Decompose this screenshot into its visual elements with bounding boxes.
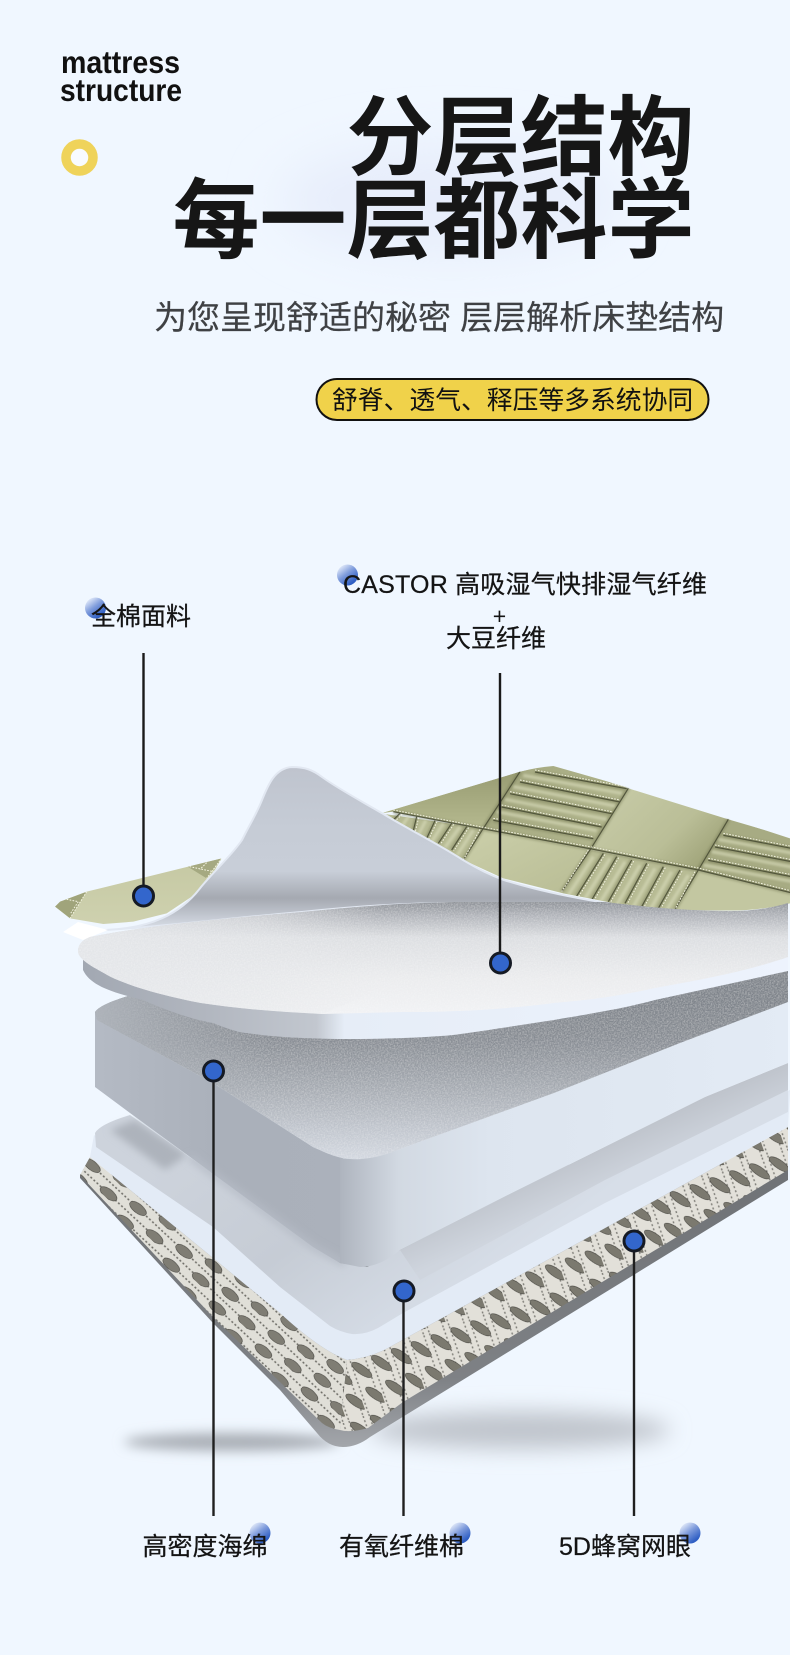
icon: yellow ring	[66, 144, 93, 171]
title	[172, 68, 694, 277]
label: aerobic fibre wadding: 有氧纤维棉	[339, 1533, 464, 1561]
layer: foam right face	[340, 1002, 788, 1267]
label: CASTOR and soy fibre	[337, 564, 707, 653]
label: 5D honeycomb mesh	[559, 1522, 700, 1561]
leader: cotton fabric	[134, 653, 154, 906]
seam shadows	[392, 772, 790, 909]
layer: towel edge	[83, 950, 788, 1039]
layer: foam left face	[95, 1012, 345, 1264]
subtitle: 为您呈现舒适的秘密 层层解析床垫结构	[154, 299, 724, 336]
label: CASTOR and soy fibre: 大豆纤维	[446, 625, 546, 653]
strip highlights	[402, 775, 790, 910]
layer: cotton cover fabric left	[55, 858, 222, 924]
mattress illustration	[50, 763, 790, 1451]
layer: 5D honeycomb mesh	[80, 1127, 788, 1431]
layer: base edge	[80, 1160, 788, 1447]
heading: mattress structure: mattress	[61, 44, 180, 80]
layer: cotton cover fabric right	[380, 763, 790, 912]
heading: mattress structure: structure	[60, 72, 182, 108]
leader: aerobic fibre	[394, 1281, 414, 1516]
label: cotton fabric: 全棉面料	[91, 603, 191, 631]
stitch lines	[392, 772, 790, 909]
callout pill	[316, 379, 708, 420]
layer: fibre side band	[90, 1090, 790, 1360]
soft glow behind title	[280, 145, 620, 255]
label: CASTOR and soy fibre: +	[493, 603, 506, 629]
title: 分层结构	[346, 68, 694, 194]
title: 每一层都科学	[172, 151, 694, 277]
label: 5D honeycomb mesh: 5D蜂窝网眼	[559, 1533, 691, 1561]
leader: 5D mesh	[624, 1231, 644, 1516]
callout pill: 舒脊、透气、释压等多系统协同	[332, 386, 693, 415]
layer: aerobic fibre wadding	[95, 1063, 788, 1334]
leader: CASTOR fibre	[490, 673, 510, 973]
layer: white notch	[63, 922, 108, 940]
heading: mattress structure	[60, 44, 182, 108]
label: high density foam: 高密度海绵	[142, 1533, 268, 1561]
label: aerobic fibre wadding	[339, 1522, 470, 1561]
label: CASTOR and soy fibre: CASTOR 高吸湿气快排湿气纤维	[343, 571, 707, 599]
layer: folded cover underside	[106, 767, 612, 930]
foam left face soft lower edge	[190, 1157, 345, 1264]
ground shadow	[124, 1411, 670, 1451]
leader: high density foam	[204, 1061, 224, 1516]
layer: moisture wicking towel surface	[78, 902, 788, 1014]
layer: high density foam top	[95, 950, 788, 1159]
